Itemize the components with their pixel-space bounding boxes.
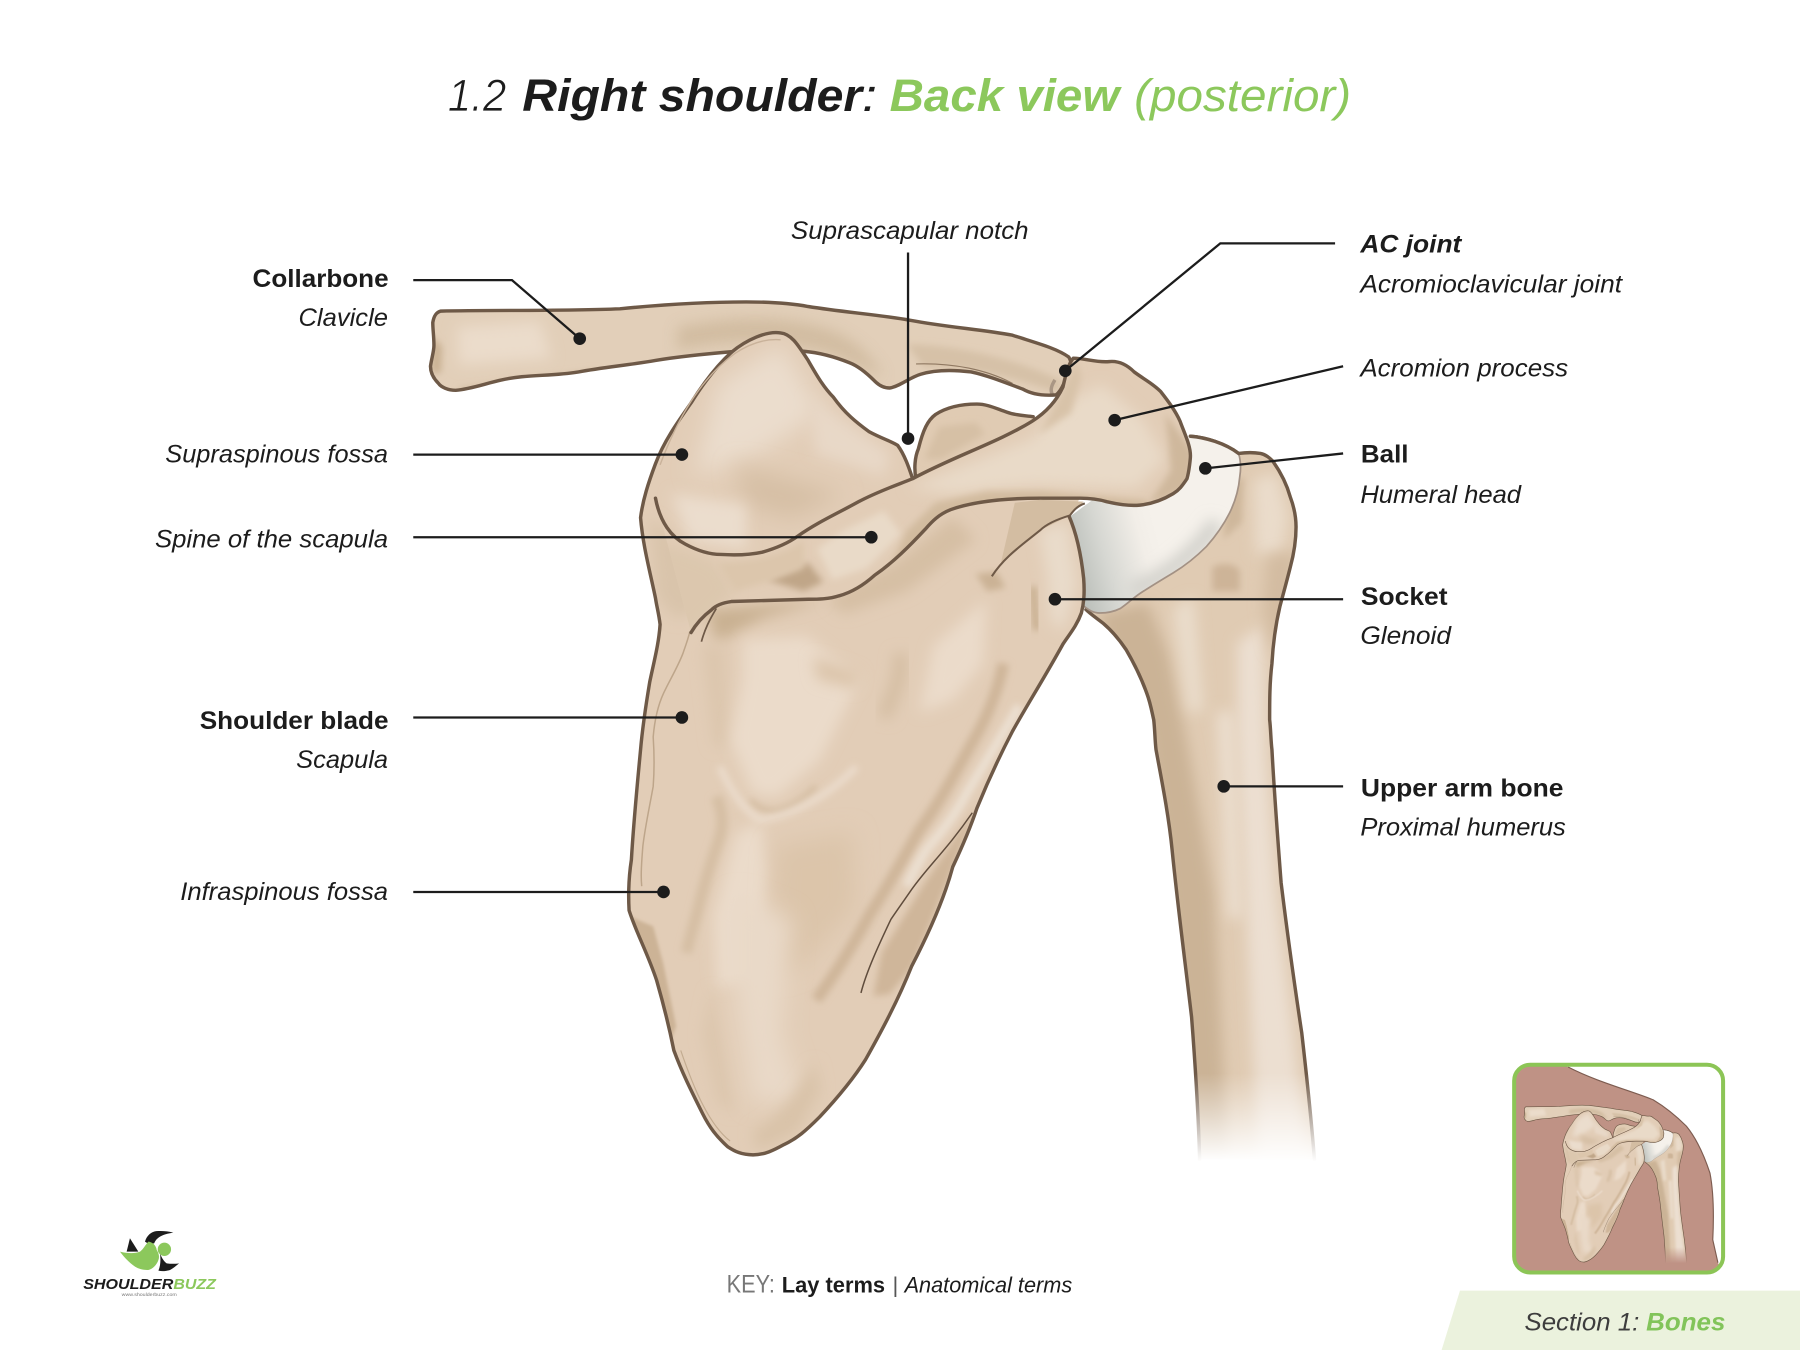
callout: AC joint xyxy=(1059,231,1623,377)
section tab: Bones xyxy=(1646,1308,1725,1336)
callout: AC joint: Acromioclavicular joint xyxy=(1358,271,1623,299)
scapula body xyxy=(629,333,1091,1155)
key: Anatomical terms xyxy=(903,1273,1072,1298)
callout: collarbone xyxy=(253,265,586,345)
callout: spine of the scapula xyxy=(155,526,878,554)
callout: infraspinous fossa: Infraspinous fossa xyxy=(180,878,388,906)
clavicle bone xyxy=(430,302,1071,396)
infraspinous shading xyxy=(707,600,827,643)
logo: ShoulderBuzz: SHOULDER xyxy=(83,1277,174,1293)
logo: ShoulderBuzz: BUZZ xyxy=(173,1277,217,1293)
humerus bone xyxy=(1086,436,1314,1162)
glenoid ridge xyxy=(992,500,1085,576)
callout: upper arm bone xyxy=(1217,775,1566,842)
callout: suprascapular notch xyxy=(791,217,1029,445)
title: 1.2 xyxy=(448,70,506,121)
logo: ShoulderBuzz xyxy=(83,1231,217,1297)
inset: locator thumbnail xyxy=(1504,1056,1728,1280)
key: KEY: xyxy=(727,1271,775,1299)
callout: supraspinous fossa xyxy=(165,441,688,469)
thumbnail bones xyxy=(1524,1105,1687,1263)
shoulder bones illustration xyxy=(430,302,1314,1162)
callout: shoulder blade xyxy=(200,707,688,774)
logo: ShoulderBuzz: www.shoulderbuzz.com xyxy=(122,1292,177,1297)
section tab: Section 1: xyxy=(1524,1308,1639,1336)
callout: acromion process xyxy=(1108,355,1568,426)
humeral head cartilage xyxy=(1070,436,1241,613)
logo icon xyxy=(120,1231,179,1271)
callout: upper arm bone: Upper arm bone xyxy=(1361,775,1564,803)
callout: upper arm bone: Proximal humerus xyxy=(1360,814,1566,842)
key xyxy=(727,1271,1072,1299)
callout: collarbone: Clavicle xyxy=(298,304,388,332)
body silhouette xyxy=(1516,1066,1719,1270)
callout: AC joint: AC joint xyxy=(1359,231,1463,259)
title: : xyxy=(862,70,877,121)
callout: shoulder blade: Scapula xyxy=(296,746,388,774)
callout: supraspinous fossa: Supraspinous fossa xyxy=(165,441,388,469)
callout: infraspinous fossa xyxy=(180,878,670,906)
callout: ball xyxy=(1199,441,1522,509)
callout: socket xyxy=(1049,583,1452,650)
callout: collarbone: Collarbone xyxy=(253,265,389,293)
callout: spine of the scapula: Spine of the scapula xyxy=(155,526,388,554)
callout: socket: Glenoid xyxy=(1360,622,1452,650)
key: Lay terms xyxy=(782,1273,885,1298)
section tab xyxy=(1442,1291,1800,1350)
callout: acromion process: Acromion process xyxy=(1358,355,1568,383)
key: | xyxy=(893,1273,898,1298)
coracoid process xyxy=(915,404,1033,480)
callout: suprascapular notch: Suprascapular notch xyxy=(791,217,1029,245)
title: (posterior) xyxy=(1134,70,1351,121)
callout: ball: Ball xyxy=(1361,441,1409,469)
callout: shoulder blade: Shoulder blade xyxy=(200,707,389,735)
callout: ball: Humeral head xyxy=(1360,481,1522,509)
supraspinous shading xyxy=(695,344,821,476)
title: Back view xyxy=(890,70,1122,121)
title xyxy=(448,70,1351,121)
callout: socket: Socket xyxy=(1361,583,1448,611)
spine of scapula and acromion xyxy=(650,358,1194,642)
title: Right shoulder xyxy=(522,70,865,121)
